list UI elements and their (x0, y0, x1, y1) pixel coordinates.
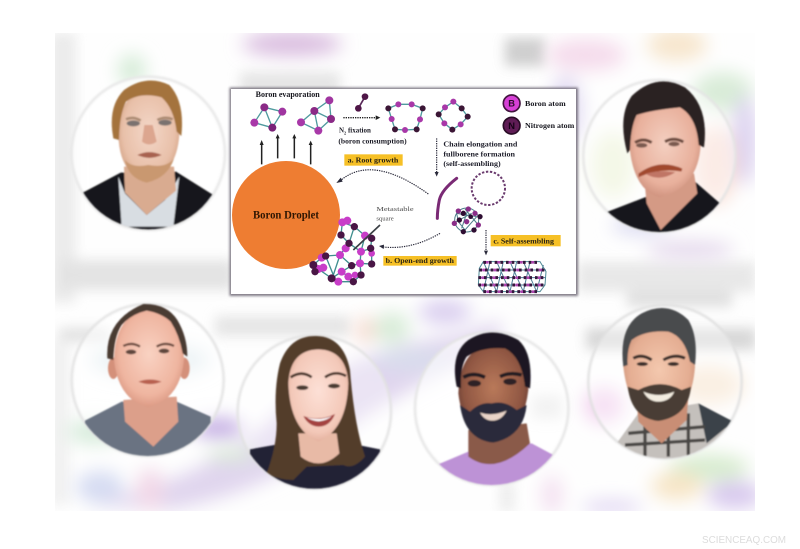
legend: boron atom: B (508, 99, 515, 109)
text: chain elongation: fullborene formation (443, 150, 515, 158)
self-assembling dotted arrow (435, 138, 439, 177)
boron-nitrogen chain (437, 178, 457, 218)
label: open-end growth: b. Open-end growth (386, 257, 454, 265)
fullborene ball (452, 206, 483, 234)
open-end growth dotted arrow (379, 233, 440, 249)
blurred background artwork (50, 29, 763, 515)
text: metastable square: Metastable (376, 206, 414, 213)
text: N2 fixation: fixation (346, 127, 371, 135)
fixation arrow (343, 115, 380, 120)
portrait 6: bearded man in plaid shirt (588, 305, 742, 460)
label: self-assembling: c. Self-assembling (493, 237, 555, 245)
legend: boron atom: Boron atom (525, 99, 566, 108)
watermark: SCIENCEAQ.COM (702, 535, 786, 546)
evaporation arrows (260, 134, 313, 164)
left half of diagram in zoom coordinates (250, 90, 457, 286)
text: metastable square: square (376, 216, 394, 223)
right half of diagram in zoom coordinates (385, 95, 574, 292)
portrait 4: smiling woman with long hair (238, 335, 391, 493)
diagram panel shadow (230, 88, 578, 296)
legend: nitrogen atom: Nitrogen atom (525, 121, 574, 130)
molecule: four-atom cluster (250, 103, 286, 132)
legend: nitrogen atom (503, 117, 574, 134)
label: root growth (344, 154, 403, 166)
portrait 5: bearded man in lilac t-shirt (415, 332, 568, 490)
legend: nitrogen atom: N (508, 121, 515, 131)
text: chain elongation: (self-assembling) (443, 160, 501, 168)
text: N2 fixation: N (339, 127, 344, 135)
text: chain elongation: Chain elongation and (443, 141, 517, 149)
label: open-end growth (383, 256, 457, 266)
label: self-assembling (491, 235, 561, 246)
nanotube (478, 262, 546, 292)
text: N2 fixation: 2 (344, 130, 346, 135)
portrait 1: man with sandy hair and dark jacket (72, 77, 225, 233)
N2 molecule (355, 93, 368, 112)
portrait 2: man with dark hair and moustache (583, 80, 735, 237)
boron droplet (232, 161, 340, 269)
metastable pointer (353, 225, 380, 250)
text: N2 fixation: (boron consumption) (338, 137, 407, 145)
legend: boron atom (503, 95, 566, 112)
label: root growth: a. Root growth (348, 156, 398, 164)
octagon ring one (385, 101, 426, 133)
octagon ring two (436, 99, 471, 133)
molecule: five-atom cluster (297, 96, 335, 135)
portrait 3: balding man in gray shirt (72, 304, 224, 463)
boron droplet: Boron Droplet (253, 208, 319, 222)
diagram panel: boron nitride nanotube growth (231, 89, 576, 294)
dotted arrow to nanotube (484, 230, 488, 255)
open-end cage cluster (309, 217, 375, 286)
root growth dotted arrow (336, 170, 428, 194)
heading: boron evaporation: Boron evaporation (256, 90, 320, 99)
fullborene dotted ring (472, 172, 505, 205)
